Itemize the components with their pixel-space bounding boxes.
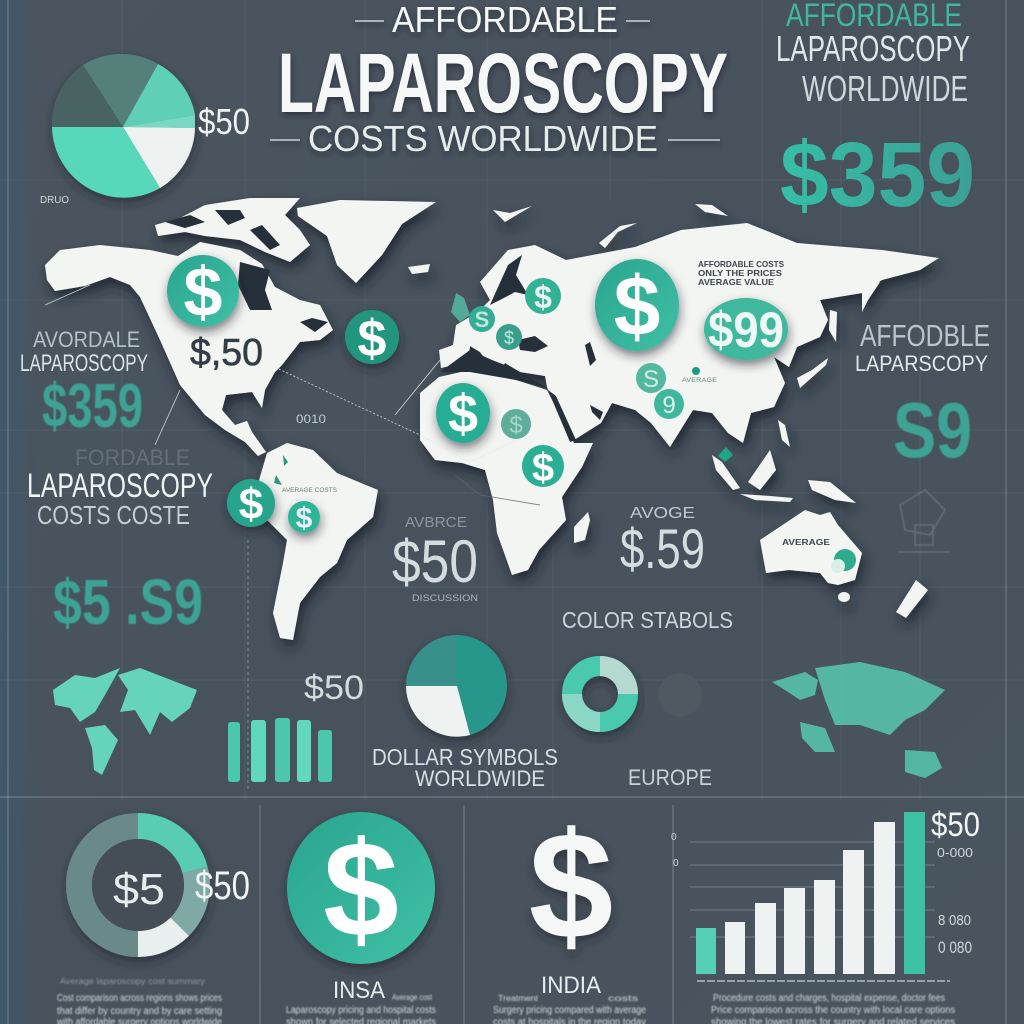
block: left upper cost: AVORDALE <box>33 327 140 352</box>
map small note: Russia: ONLY THE PRICES <box>698 268 782 278</box>
title: LAPAROSCOPY <box>278 36 728 130</box>
map marker: Europe west: S <box>475 307 489 332</box>
mini map: right <box>772 662 945 778</box>
map marker: South America east <box>288 501 320 535</box>
map marker: North America <box>167 253 239 331</box>
donut side value: $50 <box>195 864 250 908</box>
Madagascar <box>574 512 590 543</box>
donut chart: center <box>572 666 628 722</box>
label: dollar symbols worldwide: DOLLAR SYMBOLS <box>372 744 558 770</box>
block: top-right cost: WORLDWIDE <box>802 68 968 109</box>
map marker: North America: $ <box>184 253 222 331</box>
text block: column 3: costs <box>608 994 638 1003</box>
block: left lower cost <box>27 445 213 638</box>
icon: white dollar: $ <box>529 801 613 971</box>
continent: Australia <box>760 510 862 585</box>
chart scale labels: 0 <box>673 858 679 869</box>
block: left lower cost: $5 .S9 <box>53 566 203 638</box>
Arctic islands <box>155 198 310 262</box>
map marker: South America west <box>227 479 275 529</box>
chart top value: $50 <box>931 806 980 844</box>
continent: North America <box>45 242 333 456</box>
map small note: Australia: AVERAGE <box>782 538 831 547</box>
block: top-right cost <box>776 0 975 226</box>
text block: column 4: Procedure costs and charges, hospital expense, doctor fees <box>713 993 945 1004</box>
pie chart: top left <box>52 54 195 198</box>
map marker: Africa central: $ <box>509 412 523 439</box>
map marker: Central Asia: S <box>643 366 659 393</box>
map marker: Europe south <box>496 324 522 350</box>
inland seas <box>165 210 603 442</box>
chart scale labels: 0 080 <box>938 938 972 957</box>
donut inner value: $5 <box>113 865 165 914</box>
Iceland <box>408 264 430 274</box>
block: left lower cost: COSTS COSTE <box>37 500 190 530</box>
New Zealand <box>896 580 928 618</box>
text block: column 3: Treatment <box>498 994 539 1003</box>
text block: column 1: that differ by country and by care setting <box>57 1006 222 1017</box>
block: left upper cost <box>20 327 148 441</box>
label: INDIA: INDIA <box>541 972 601 999</box>
map marker: South America west: $ <box>239 480 263 529</box>
map marker: Africa west <box>436 383 490 444</box>
chart bars <box>696 812 925 974</box>
title <box>270 0 728 159</box>
chart axis <box>697 980 950 982</box>
map detail: Asia small note: AVERAGE <box>682 378 717 384</box>
block: left lower cost: LAPAROSCOPY <box>27 467 213 505</box>
mini map: left <box>53 668 197 775</box>
pie value label: $50 <box>198 101 250 142</box>
text block: column 3 <box>493 994 646 1024</box>
mini chart value: $50 <box>304 669 364 707</box>
map marker: Russia large <box>595 259 679 353</box>
map marker: UK <box>451 293 470 322</box>
panel: teal dollar icon: $ <box>323 813 399 965</box>
map detail: South America small note: AVERAGE COSTS <box>282 488 337 494</box>
text block: column 1 <box>56 977 222 1024</box>
chart scale labels: 0 <box>671 832 677 843</box>
label: color symbols: COLOR STABOLS <box>562 607 733 633</box>
map marker: Europe north <box>525 278 561 315</box>
map marker: Europe west <box>469 306 495 332</box>
block: center-left average <box>392 514 478 603</box>
title: COSTS WORLDWIDE <box>308 118 658 159</box>
map marker: Atlantic <box>345 310 399 368</box>
text block: column 4: Price comparison across the country with local care options <box>711 1005 955 1016</box>
map marker: Central Asia <box>636 363 666 393</box>
map small note: Russia: AFFORDABLE COSTS <box>698 259 784 269</box>
map badge: $99: $99 <box>708 302 784 358</box>
label: INSA: INSA <box>333 977 385 1004</box>
map marker: Africa east <box>522 445 564 490</box>
faded emblem: right <box>898 490 950 552</box>
continent: Africa <box>420 370 593 575</box>
chart scale labels: 0-000 <box>937 845 973 860</box>
block: right cost: LAPARSCOPY <box>855 351 988 376</box>
block: center-left average: AVBRCE <box>405 514 467 531</box>
continent: South America <box>257 443 378 640</box>
map marker: Africa west: $ <box>448 384 478 444</box>
text block: column 2 <box>286 993 436 1024</box>
block: left lower cost: FORDABLE <box>75 445 190 470</box>
label: dollar symbols worldwide: WORLDWIDE <box>415 766 545 791</box>
map marker: Europe north: $ <box>534 279 552 315</box>
world map <box>45 198 939 640</box>
block: right cost: AFFODBLE <box>860 318 990 353</box>
text block: column 4 <box>711 993 955 1024</box>
map marker: South America east: $ <box>296 502 313 535</box>
map detail: South America small note <box>274 455 337 494</box>
map label: North America value: $,50 <box>190 332 263 374</box>
Tasmania <box>838 592 850 602</box>
block: top-right cost: $359 <box>780 124 975 226</box>
text block: column 1: Average laparoscopy cost summary <box>60 977 205 986</box>
block: center average <box>620 505 705 580</box>
text block: column 1: Cost comparison across regions shows prices <box>57 993 222 1004</box>
map label: Central America tag: 0010 <box>296 412 326 426</box>
map marker: Africa central <box>501 409 531 439</box>
text block: column 2: Average cost <box>392 993 433 1002</box>
map marker: Atlantic: $ <box>358 310 387 368</box>
pie chart: center <box>406 635 507 737</box>
text block: column 2: Laparoscopy pricing and hospital costs <box>286 1005 436 1016</box>
map detail: Asia small note <box>682 367 717 384</box>
chart scale labels: 8 080 <box>938 912 971 929</box>
block: right cost <box>855 318 990 474</box>
pie caption: DRUO <box>40 195 69 206</box>
chart scale labels <box>671 832 973 957</box>
chart gridlines <box>690 842 935 937</box>
donut ring <box>79 826 197 944</box>
mini bar chart <box>228 718 332 782</box>
map marker: Australia <box>831 549 856 573</box>
label: Europe: EUROPE <box>628 765 712 790</box>
block: left upper cost: LAPAROSCOPY <box>20 350 148 377</box>
connector lines <box>45 285 540 790</box>
block: center-left average: DISCUSSION <box>412 593 478 603</box>
continent: Greenland <box>297 200 436 283</box>
map marker: Africa east: $ <box>532 446 554 490</box>
map marker: South Asia: 9 <box>662 392 676 419</box>
block: center average: AVOGE <box>630 505 695 522</box>
panel: donut cost <box>79 826 250 944</box>
label: dollar symbols worldwide <box>372 744 558 791</box>
continent: Eurasia <box>439 223 939 447</box>
map marker: Russia large: $ <box>614 259 660 353</box>
map marker: Southeast Asia <box>718 447 733 462</box>
panel: teal dollar icon <box>287 812 435 965</box>
islands: Southeast Asia and Japan <box>493 204 880 503</box>
block: center average: $.59 <box>620 517 705 580</box>
map small note: Russia: AVERAGE VALUE <box>698 277 774 287</box>
title: AFFORDABLE <box>392 0 618 40</box>
block: left upper cost: $359 <box>42 372 143 441</box>
panel: bar chart <box>671 806 980 981</box>
map marker: Europe south: $ <box>504 328 514 348</box>
faint circle <box>658 673 702 717</box>
block: center-left average: $50 <box>392 528 478 595</box>
text block: column 3: Surgery pricing compared with average <box>493 1005 646 1016</box>
block: right cost: S9 <box>893 386 972 474</box>
map small note: Russia <box>698 259 784 287</box>
map marker: South Asia <box>654 389 684 419</box>
